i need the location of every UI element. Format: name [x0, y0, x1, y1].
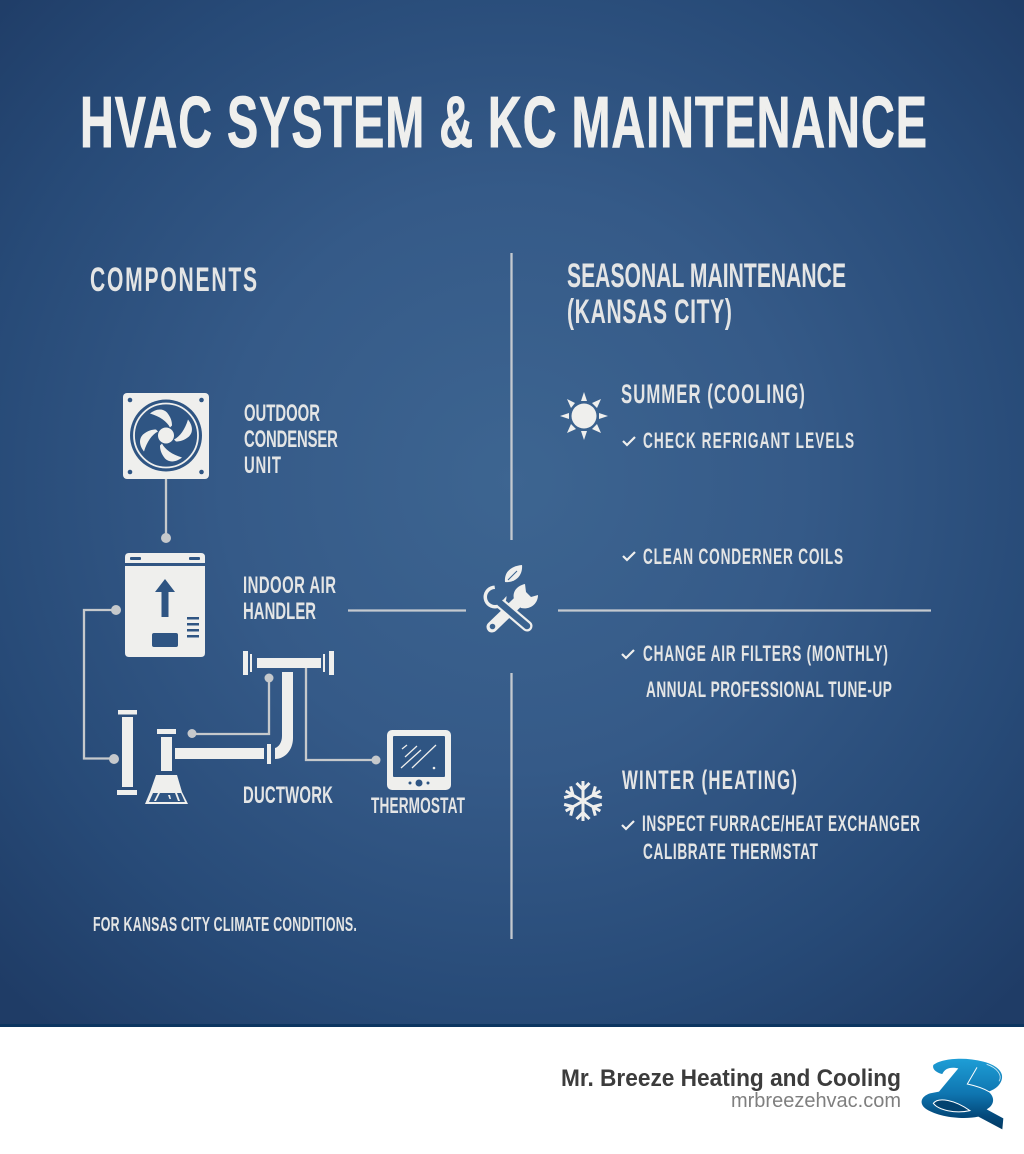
item: CALIBRATE THERMSTAT — [643, 839, 818, 864]
label: ductwork: DUCTWORK — [243, 783, 333, 809]
dividers — [348, 253, 931, 939]
connector: condenser to air handler — [161, 479, 171, 543]
icon: sun — [560, 392, 608, 440]
check item: CHANGE AIR FILTERS (MONTHLY) — [643, 641, 888, 666]
check item: INSPECT FURRACE/HEAT EXCHANGER — [642, 811, 920, 836]
icon: indoor air handler — [125, 553, 205, 657]
connector: air handler to duct — [84, 605, 121, 764]
icon: snowflake — [562, 781, 604, 821]
footer brand name: Mr. Breeze Heating and Cooling — [561, 1065, 901, 1092]
label: indoor air handler — [243, 573, 336, 625]
label: outdoor condenser unit: UNIT — [244, 453, 281, 479]
heading: seasonal maintenance: (KANSAS CITY) — [567, 292, 732, 330]
section: winter heating: WINTER (HEATING) — [622, 765, 797, 795]
label: indoor air handler: HANDLER — [243, 599, 316, 625]
icon: tools with leaf — [484, 565, 538, 629]
check item: CHECK REFRIGANT LEVELS — [643, 428, 854, 453]
label: thermostat: THERMOSTAT — [371, 793, 465, 818]
connectors: duct to thermostat — [188, 668, 380, 764]
section: summer cooling: SUMMER (COOLING) — [621, 379, 805, 409]
icon: ductwork — [117, 651, 334, 804]
item: ANNUAL PROFESSIONAL TUNE-UP — [646, 677, 892, 702]
label: outdoor condenser unit: CONDENSER — [244, 427, 338, 453]
footer band — [0, 1024, 1024, 1154]
label: indoor air handler: INDOOR AIR — [243, 573, 336, 599]
label: outdoor condenser unit: OUTDOOR — [244, 401, 320, 427]
footer website: mrbreezehvac.com — [731, 1090, 901, 1112]
section: winter heating — [622, 765, 920, 864]
heading: components: COMPONENTS — [90, 260, 257, 298]
section: summer cooling — [621, 379, 892, 702]
heading: seasonal maintenance — [567, 256, 846, 330]
note: climate conditions: FOR KANSAS CITY CLIMATE CONDITIONS. — [93, 913, 357, 936]
icon: thermostat — [387, 730, 451, 790]
title: HVAC SYSTEM & KC MAINTENANCE — [80, 82, 927, 162]
logo — [922, 1059, 1003, 1129]
icon: outdoor condenser fan — [123, 393, 209, 479]
label: outdoor condenser unit — [244, 401, 338, 479]
check item: CLEAN CONDERNER COILS — [643, 544, 843, 569]
heading: seasonal maintenance: SEASONAL MAINTENANCE — [567, 256, 846, 294]
